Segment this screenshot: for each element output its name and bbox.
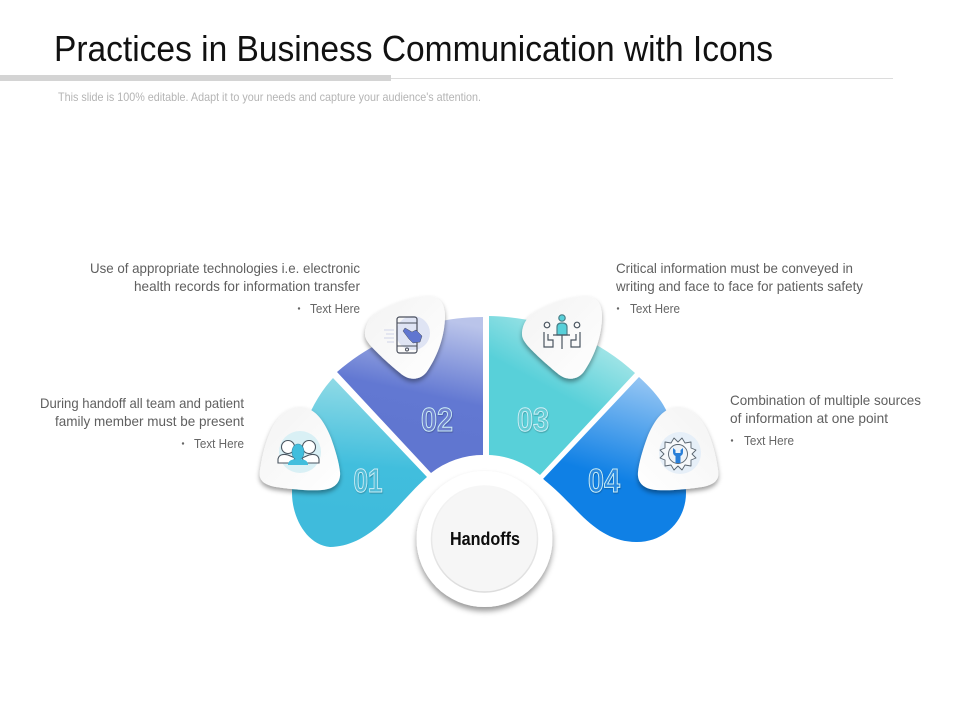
number 04: 04 [588,462,621,499]
text block: 03 critical information [615,260,863,316]
segment 03 [489,316,635,475]
pick: 04 [638,407,718,490]
pick: 01 [260,407,340,490]
text block: 02 technologies: health records for information transfer [134,278,360,294]
number 01: 01 [354,462,382,499]
text block: 02 technologies [90,260,360,316]
icon: team [278,431,321,473]
text block: 01 handoff: During handoff all team and patient [40,395,244,411]
text block: 04 multiple sources: Text Here [744,434,794,448]
title: Practices in Business Communication with Icons [54,28,773,69]
icon: meeting [544,315,580,349]
title rule [0,75,893,81]
number 03: 03 [517,401,549,438]
segment 02 [337,317,483,473]
text block: 01 handoff: Text Here [194,437,244,451]
text block: 01 handoff [40,395,244,451]
center circle: Handoffs: Handoffs [450,529,520,549]
text block: 04 multiple sources: Combination of multiple sources [730,392,921,408]
text block: 03 critical information: Text Here [630,302,680,316]
icon: phone tap [384,316,430,353]
number 02: 02 [421,401,453,438]
pick: 02 [365,296,445,379]
text block: 04 multiple sources [730,392,921,448]
icon: gear and wrench [659,432,701,474]
segment 01 [292,378,427,547]
text block: 03 critical information: writing and face to face for patients safety [615,278,863,294]
subtitle: This slide is 100% editable. Adapt it to your needs and capture your audience's attention. [58,90,481,104]
text block: 02 technologies: Use of appropriate technologies i.e. electronic [90,260,360,276]
segment 04 [543,377,686,542]
text block: 03 critical information: Critical information must be conveyed in [616,260,853,276]
text block: 01 handoff: family member must be present [55,413,244,429]
center circle: Handoffs [400,455,568,623]
pick: 03 [522,296,602,379]
text block: 02 technologies: Text Here [310,302,360,316]
text block: 04 multiple sources: of information at one point [730,410,888,426]
